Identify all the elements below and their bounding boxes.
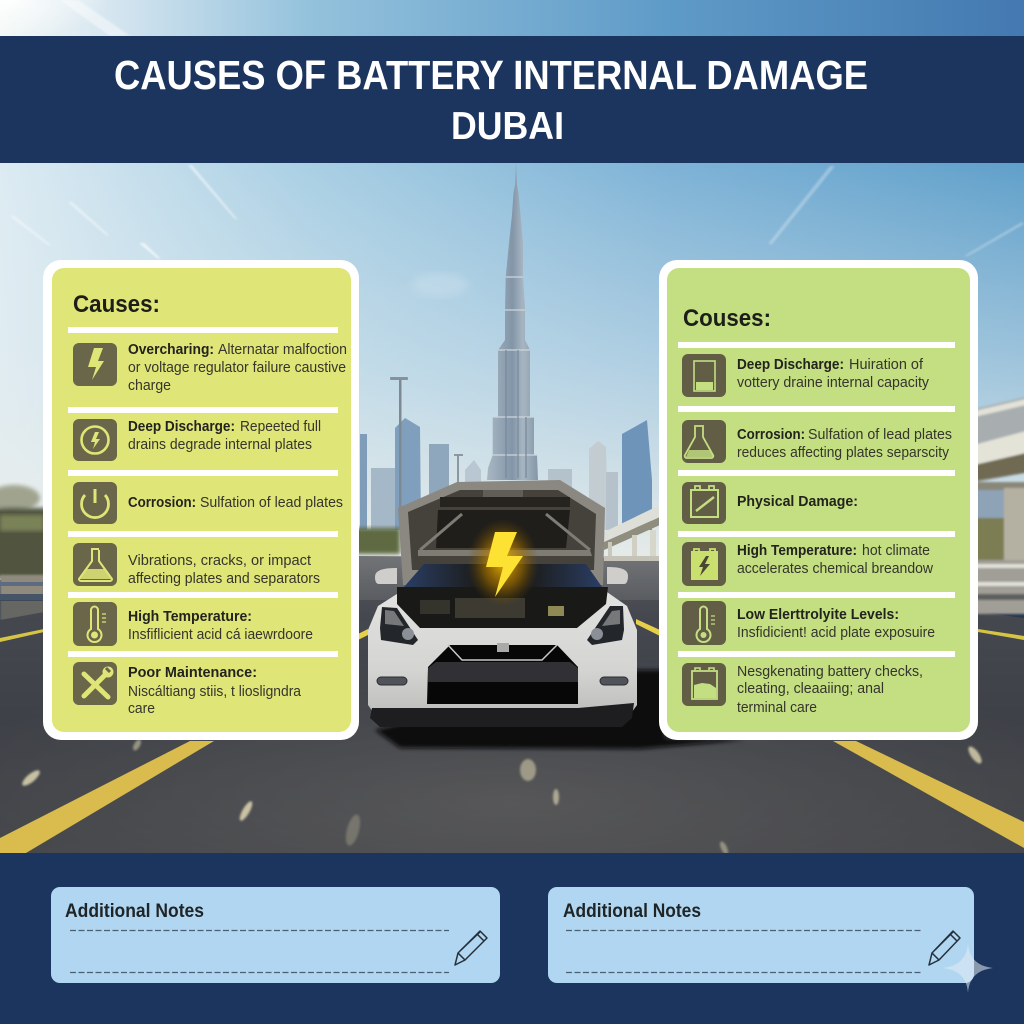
item: deep discharge bbox=[682, 354, 930, 397]
item: low electrolyte: Low Elerttrolyite Levels: bbox=[737, 607, 899, 623]
dividers bbox=[678, 342, 955, 657]
item: corrosion: Sulfation of lead plates bbox=[200, 495, 343, 511]
fog lamps bbox=[377, 677, 628, 685]
heading: Couses: bbox=[683, 305, 771, 332]
note lines bbox=[566, 930, 921, 972]
item: low electrolyte: Insfidicient! acid plate exposuire bbox=[737, 625, 935, 641]
background: sky strip above title bbox=[0, 0, 1024, 40]
item: vibrations: affecting plates and separators bbox=[128, 571, 320, 587]
item: overcharging bbox=[73, 342, 347, 394]
item: vibrations bbox=[73, 543, 320, 587]
title band bbox=[0, 36, 1024, 163]
item: high temperature: accelerates chemical breandow bbox=[737, 561, 934, 577]
icon: sparkle bbox=[943, 943, 993, 993]
icon: pencil bbox=[929, 931, 960, 965]
item: neglected maintenance bbox=[682, 663, 923, 716]
item: physical damage bbox=[682, 482, 858, 524]
note lines bbox=[70, 930, 449, 972]
item: overcharging: or voltage regulator failure caustive bbox=[128, 360, 346, 376]
item: corrosion: Corrosion: bbox=[128, 495, 196, 511]
body bbox=[368, 592, 637, 722]
background: overpass right bbox=[604, 396, 1024, 614]
heading: Additional Notes bbox=[65, 901, 204, 922]
title: CAUSES OF BATTERY INTERNAL DAMAGE bbox=[114, 52, 868, 98]
item: poor maintenance: Niscáltiang stiis, t liosligndra bbox=[128, 684, 302, 700]
item: corrosion: Sulfation of lead plates bbox=[808, 427, 952, 443]
item: high temperature: High Temperature: bbox=[737, 543, 857, 559]
item: overcharging: Overcharing: bbox=[128, 342, 214, 358]
item: high temperature bbox=[73, 602, 313, 646]
item: deep discharge bbox=[73, 419, 321, 461]
item: poor maintenance bbox=[73, 662, 302, 717]
item: high temperature bbox=[682, 542, 934, 586]
panel: causes left bbox=[43, 260, 359, 740]
road light streaks bbox=[20, 738, 984, 856]
item: overcharging: charge bbox=[128, 378, 171, 394]
lightning bolt with glow bbox=[467, 519, 539, 607]
item: corrosion: reduces affecting plates separscity bbox=[737, 445, 950, 461]
item: neglected maintenance: Nesgkenating battery checks, bbox=[737, 664, 923, 680]
headlights bbox=[380, 606, 624, 645]
subtitle: DUBAI bbox=[451, 105, 564, 148]
mirrors bbox=[375, 567, 628, 584]
car shadow bbox=[375, 670, 745, 749]
item: overcharging: Alternatar malfoction bbox=[218, 342, 347, 358]
item: high temperature: hot climate bbox=[862, 543, 930, 559]
panel: additional notes right bbox=[548, 887, 974, 983]
item: deep discharge: drains degrade internal plates bbox=[128, 437, 312, 453]
icon: pencil bbox=[455, 931, 487, 965]
item: physical damage: Physical Damage: bbox=[737, 494, 858, 510]
item: corrosion bbox=[682, 420, 952, 463]
item: poor maintenance: Poor Maintenance: bbox=[128, 665, 257, 681]
grille bbox=[427, 643, 578, 704]
background: road bbox=[0, 556, 1024, 853]
item: deep discharge: vottery draine internal capacity bbox=[737, 375, 930, 391]
item: high temperature: High Temperature: bbox=[128, 609, 252, 625]
item: deep discharge: Huiration of bbox=[849, 357, 924, 373]
Burj Khalifa tower bbox=[487, 163, 538, 480]
item: deep discharge: Deep Discharge: bbox=[128, 419, 235, 435]
item: neglected maintenance: cleating, cleaaiing; anal bbox=[737, 681, 884, 697]
heading: Additional Notes bbox=[563, 901, 701, 922]
item: corrosion: Corrosion: bbox=[737, 427, 805, 443]
open hood bbox=[398, 480, 605, 587]
car: sports car with open hood bbox=[368, 480, 745, 749]
background: trees left bbox=[0, 485, 400, 621]
item: vibrations: Vibrations, cracks, or impact bbox=[128, 553, 311, 569]
skyline buildings bbox=[360, 377, 652, 530]
dividers bbox=[68, 327, 338, 657]
footer band bbox=[0, 853, 1024, 1024]
front lip bbox=[370, 703, 634, 727]
engine bay bbox=[397, 587, 608, 628]
item: high temperature: Insfiflicient acid cá iaewrdoore bbox=[128, 627, 313, 643]
item: corrosion bbox=[73, 482, 343, 524]
panel: additional notes left bbox=[51, 887, 500, 983]
panel: causes right bbox=[659, 260, 978, 740]
item: deep discharge: Deep Discharge: bbox=[737, 357, 844, 373]
item: poor maintenance: care bbox=[128, 701, 155, 717]
road markings bbox=[0, 619, 1024, 853]
item: neglected maintenance: terminal care bbox=[737, 700, 817, 716]
background: sky with rays bbox=[0, 160, 1024, 580]
item: deep discharge: Repeeted full bbox=[240, 419, 321, 435]
heading: Causes: bbox=[73, 291, 160, 318]
item: low electrolyte bbox=[682, 601, 935, 645]
